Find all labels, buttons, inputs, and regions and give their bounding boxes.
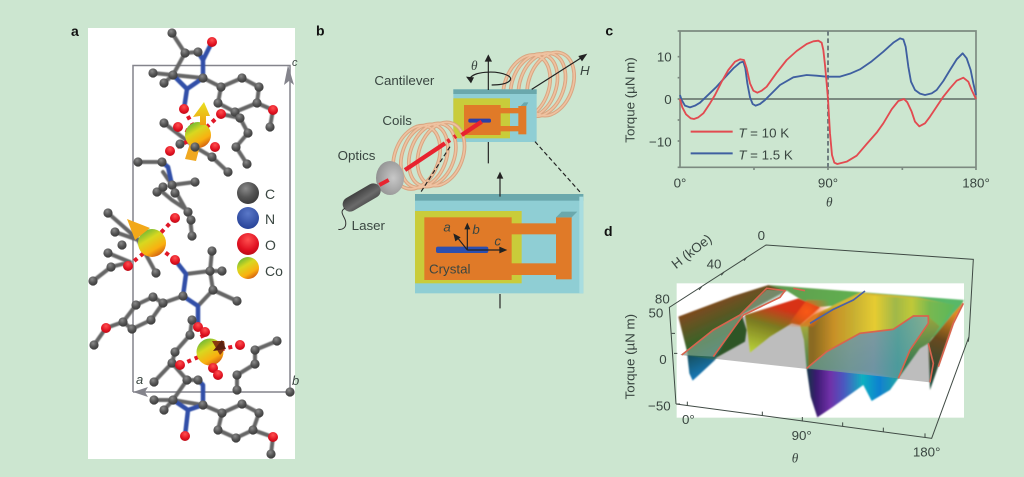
main yellow-green face xyxy=(800,293,953,378)
labels for setup: b xyxy=(472,222,480,237)
crystal axis arrowheads xyxy=(453,223,507,253)
legend of atom types: Co xyxy=(265,263,283,279)
labels for setup: c xyxy=(494,233,501,248)
front coil xyxy=(385,116,473,196)
zero contour lines xyxy=(682,288,963,382)
right edge xyxy=(928,302,964,390)
labels for setup: Cantilever xyxy=(374,73,435,88)
legend of atom types: C xyxy=(265,186,275,202)
zoom dashed guides xyxy=(420,142,581,193)
axis tick labels: 0° xyxy=(674,175,686,190)
oxygen atoms xyxy=(101,37,278,442)
left trough xyxy=(687,355,715,381)
rotation axis xyxy=(487,60,490,163)
labels for setup: Optics xyxy=(338,148,376,163)
crystal axes xyxy=(457,227,502,250)
upper green region xyxy=(768,285,964,340)
axis labels: 0° xyxy=(682,412,695,427)
x axis title: θ xyxy=(792,450,799,465)
legend of atom types: O xyxy=(265,237,276,253)
laser wire xyxy=(338,208,346,229)
axis labels a b c: c xyxy=(292,57,298,69)
orange ridge glow xyxy=(787,300,833,327)
axis labels a b c: a xyxy=(136,372,143,387)
molecular bonds xyxy=(93,33,277,454)
axis labels a b c xyxy=(136,57,299,388)
dashed coordination bonds xyxy=(128,109,240,375)
axis labels: 40 xyxy=(707,256,721,271)
white plot background xyxy=(677,283,964,418)
labels for setup: Laser xyxy=(352,218,386,233)
labels for setup: Crystal xyxy=(429,261,471,276)
H axis title: H (kOe) xyxy=(669,231,715,272)
axis tick labels: 0 xyxy=(664,92,672,107)
laser beam xyxy=(405,122,482,170)
frame ticks xyxy=(672,257,925,437)
axis labels: 80 xyxy=(655,291,670,306)
rotation arrowhead xyxy=(466,77,474,83)
axis labels: −50 xyxy=(648,399,671,414)
small cantilever xyxy=(453,89,537,142)
axis tick labels: −10 xyxy=(649,135,672,150)
y axis title: Torque (µN m) xyxy=(622,57,637,143)
panel b: experimental setup xyxy=(316,22,590,308)
rotation arrow theta xyxy=(470,72,511,85)
zero line xyxy=(680,96,976,102)
legend of atom types xyxy=(237,182,283,279)
rotation axis arrowhead xyxy=(485,54,492,62)
translucent zero-plane overlay xyxy=(807,316,928,378)
left ridge xyxy=(678,285,787,360)
legend: T = 10 K xyxy=(738,125,789,140)
axis labels: 180° xyxy=(913,445,940,460)
legend xyxy=(691,125,793,162)
axis arrow c xyxy=(284,65,294,85)
zero plane xyxy=(680,315,930,382)
panel label a: a xyxy=(71,23,79,39)
second ridge xyxy=(745,298,820,353)
cobalt atom with moment arrow 1 xyxy=(185,102,211,161)
laser body xyxy=(350,191,373,204)
axis tick labels: 10 xyxy=(657,50,672,65)
labels for setup: a xyxy=(443,219,451,234)
y axis title: Torque (µN m) xyxy=(622,314,637,399)
legend of atom types: N xyxy=(265,211,275,227)
x axis title: θ xyxy=(826,195,833,210)
unit cell box xyxy=(133,66,290,392)
axis labels a b c: b xyxy=(292,373,299,388)
curve T = 1.5 K xyxy=(680,38,976,107)
enlarged axis arrows xyxy=(498,178,502,308)
banded ridge colours xyxy=(808,295,955,367)
beam through lens xyxy=(379,180,389,185)
panel d: 3D torque surface xyxy=(604,223,973,465)
axis tick labels: 180° xyxy=(962,175,990,190)
white panel background xyxy=(88,28,295,459)
axis labels: 90° xyxy=(792,428,812,443)
cobalt atom 3 xyxy=(196,338,226,366)
panel label b: b xyxy=(316,22,325,38)
curve T = 10 K xyxy=(680,41,976,164)
carbon atoms xyxy=(88,28,295,459)
rear coil highlight xyxy=(495,46,583,125)
T contour line xyxy=(810,291,865,323)
field arrow H xyxy=(532,56,584,89)
legend: T = 1.5 K xyxy=(738,147,793,162)
enlarged cantilever xyxy=(415,194,583,293)
purple trough xyxy=(807,368,898,417)
axis labels: 0 xyxy=(659,352,667,367)
fold between ridges xyxy=(715,315,747,358)
axis arrow a xyxy=(133,387,148,397)
panel label d: d xyxy=(604,223,613,239)
panel label c: c xyxy=(605,22,613,38)
axis tick labels: 90° xyxy=(818,175,838,190)
labels for setup: Coils xyxy=(382,113,412,128)
axis tick labels xyxy=(649,50,990,190)
panel c: torque versus angle chart xyxy=(605,22,990,210)
labels for setup: H xyxy=(580,63,590,78)
enlarged axis arrowhead xyxy=(497,172,503,179)
axis labels: 50 xyxy=(649,305,663,320)
axis labels: 0 xyxy=(758,228,765,243)
surface xyxy=(678,285,964,417)
rear coil xyxy=(495,46,583,125)
labels for setup: θ xyxy=(471,58,478,73)
front coil highlight xyxy=(385,116,473,196)
optics lens xyxy=(376,161,404,195)
labels for setup xyxy=(338,58,590,276)
translucent overlay left xyxy=(682,290,785,357)
axis labels xyxy=(648,228,940,460)
cobalt atom with moment arrow 2 xyxy=(127,219,166,257)
3D box frame xyxy=(669,245,973,438)
field arrow head xyxy=(578,54,587,61)
plot frame and ticks xyxy=(678,31,976,170)
panel a: crystal structure xyxy=(71,23,299,459)
dashed line at 90 degrees xyxy=(825,31,831,167)
